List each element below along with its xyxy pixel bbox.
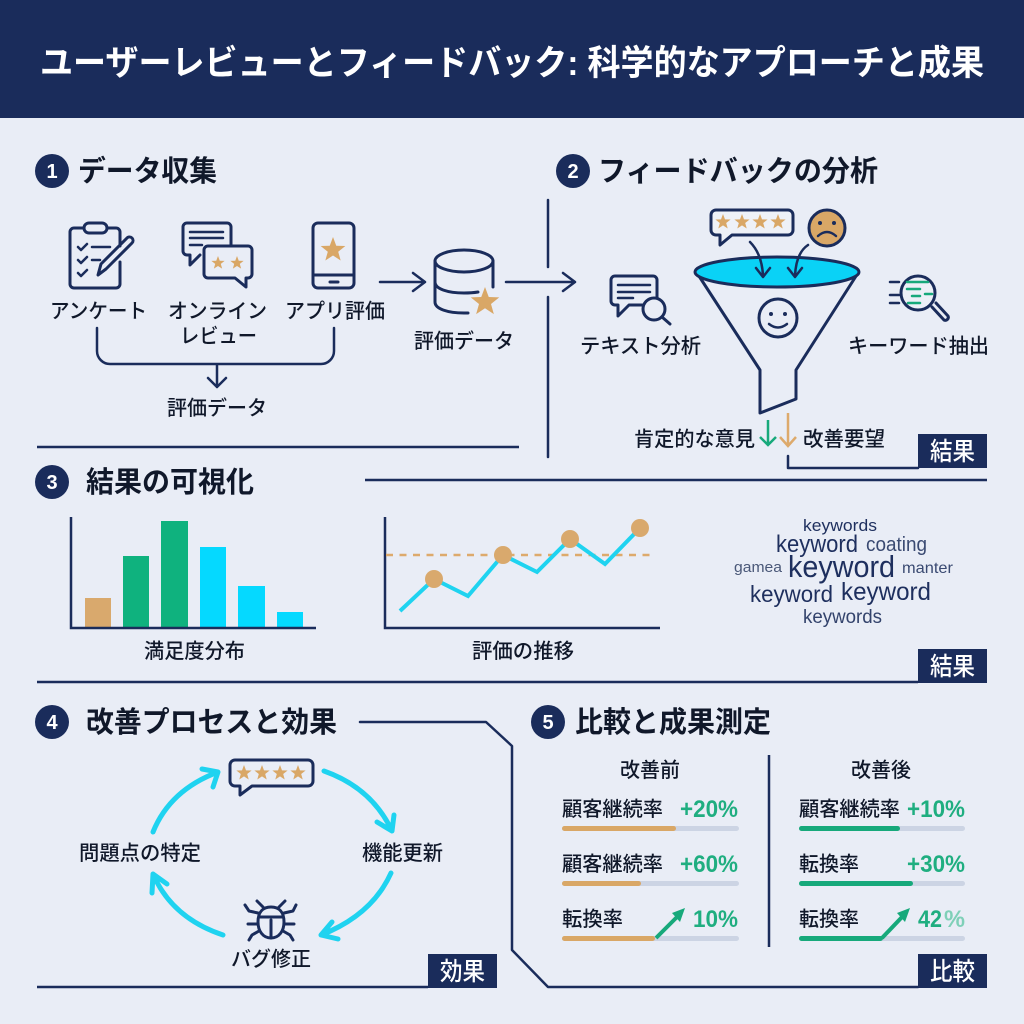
- arrow: bracket merge: [97, 328, 334, 387]
- panel: feedback analysis: [556, 154, 989, 468]
- arrow: review into funnel: [750, 242, 770, 277]
- word cloud: keyword: [750, 581, 833, 607]
- arrow: to feature update: [324, 771, 394, 831]
- word cloud: keyword: [841, 578, 931, 606]
- badge: result: [788, 434, 987, 468]
- label: text analysis: テキスト分析: [580, 335, 701, 358]
- word cloud: keyword: [776, 531, 858, 558]
- badge: result: 結果: [930, 438, 975, 466]
- metric row: after 3: [799, 906, 965, 941]
- arrow: to database: [380, 273, 425, 291]
- label: online review: レビュー: [180, 325, 257, 348]
- icon: review bubble: [230, 760, 313, 795]
- icon: database with star: [435, 250, 499, 314]
- icon: keyword magnifier: [890, 276, 948, 320]
- label: rating trend: 評価の推移: [472, 640, 574, 663]
- metric row: after 2: 転換率: [799, 853, 859, 876]
- label: problem identification: 問題点の特定: [79, 842, 201, 865]
- column heading: after: 改善後: [851, 759, 911, 782]
- icon: online review bubbles: [183, 223, 252, 287]
- bar chart: [71, 517, 316, 628]
- header band: [0, 0, 1024, 118]
- icon: sad face: [809, 210, 845, 246]
- heading: section 1: [35, 154, 217, 188]
- metric row: before 1: +20%: [680, 796, 738, 823]
- label: survey: アンケート: [50, 300, 147, 323]
- heading: section 3: 結果の可視化: [86, 466, 254, 499]
- label: rating data: 評価データ: [414, 329, 514, 353]
- heading: section 1: 1: [46, 161, 58, 183]
- word cloud: keywords: [803, 516, 877, 535]
- heading: section 5: 比較と成果測定: [575, 706, 771, 739]
- icon: funnel: [695, 257, 859, 413]
- badge: comparison: 比較: [930, 958, 975, 986]
- word cloud: gamea: [734, 559, 783, 576]
- metric row: before 2: 顧客継続率: [562, 853, 663, 876]
- word cloud: [734, 516, 954, 628]
- arrow: face into funnel: [788, 245, 808, 277]
- icon: survey clipboard: [70, 223, 133, 288]
- label: positive opinions: 肯定的な意見: [634, 428, 755, 451]
- word cloud: keyword: [788, 549, 895, 584]
- badge: result: [918, 649, 987, 683]
- arrow: to review: [153, 769, 218, 832]
- icon: app rating phone: [313, 223, 354, 288]
- heading: section 4: 4: [46, 712, 58, 734]
- label: app rating: アプリ評価: [285, 300, 385, 323]
- heading: section 3: 3: [46, 472, 58, 494]
- arrow: to analysis: [506, 273, 575, 291]
- panel: comparison: [531, 705, 987, 988]
- icon: text analysis: [611, 276, 670, 324]
- icon: star review bubble: [711, 210, 793, 245]
- heading: section 2: 2: [567, 161, 579, 183]
- arrow: improvement: [780, 413, 796, 446]
- metric row: after 3: %: [944, 906, 965, 933]
- metric row: after 1: +10%: [907, 796, 965, 823]
- label: online review: オンライン: [168, 300, 267, 323]
- heading: section 1: データ収集: [78, 154, 217, 188]
- column heading: before: 改善前: [620, 759, 680, 782]
- arrow: to problem identification: [152, 874, 223, 935]
- label: online review: [168, 300, 267, 348]
- arrow: positive: [760, 420, 776, 445]
- metric row: before 1: [562, 796, 739, 831]
- label: satisfaction distribution: 満足度分布: [144, 640, 245, 663]
- title: ユーザーレビューとフィードバック: 科学的なアプローチと成果: [40, 44, 984, 83]
- heading: section 5: 5: [542, 712, 554, 734]
- label: rating data lower: 評価データ: [167, 396, 267, 420]
- arrow: to bug fix: [321, 873, 391, 939]
- word cloud: manter: [902, 560, 954, 577]
- metric row: after 3: 転換率: [799, 908, 859, 931]
- icon: bug: [245, 901, 296, 940]
- line chart: [385, 517, 660, 628]
- metric row: before 3: 転換率: [562, 908, 623, 931]
- heading: section 2: フィードバックの分析: [598, 155, 878, 188]
- label: feature update: 機能更新: [362, 842, 443, 865]
- word cloud: keywords: [803, 607, 882, 628]
- metric row: after 2: [799, 851, 965, 886]
- badge: comparison: [918, 954, 987, 988]
- metric row: after 1: 顧客継続率: [799, 798, 900, 821]
- metric row: after 1: [799, 796, 965, 831]
- panel: visualization: [35, 465, 987, 683]
- metric row: before 3: [562, 906, 739, 941]
- metric row: before 3: 10%: [693, 906, 738, 933]
- badge: effect: 効果: [440, 958, 485, 986]
- panel: improvement process: [35, 705, 497, 988]
- word cloud: coating: [866, 534, 927, 556]
- metric row: before 1: 顧客継続率: [562, 798, 663, 821]
- metric row: after 3: 42: [918, 906, 942, 933]
- metric row: before 2: [562, 851, 739, 886]
- label: keyword extraction: キーワード抽出: [848, 335, 989, 358]
- metric row: before 2: +60%: [680, 851, 738, 878]
- heading: section 4: 改善プロセスと効果: [86, 706, 337, 739]
- badge: result: 結果: [930, 653, 975, 681]
- badge: effect: [428, 954, 497, 988]
- panel: data collection: [35, 154, 575, 420]
- metric row: after 2: +30%: [907, 851, 965, 878]
- label: bug fix: バグ修正: [231, 948, 311, 971]
- label: improvement requests: 改善要望: [803, 428, 885, 451]
